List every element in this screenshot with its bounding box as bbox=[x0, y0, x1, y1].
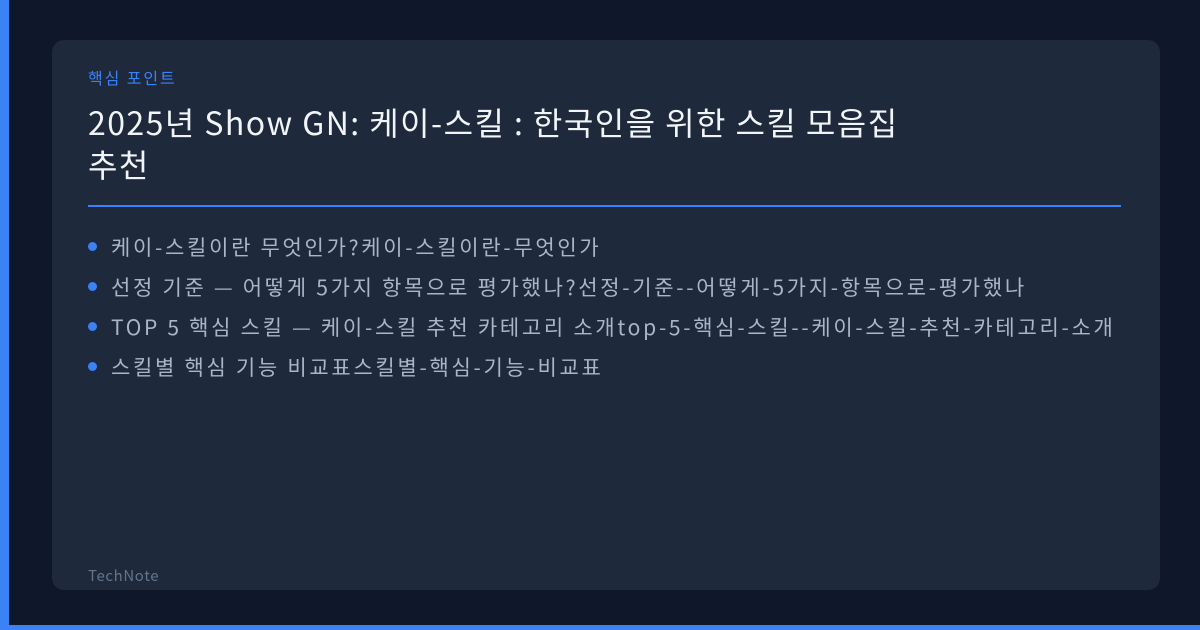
bullet 4: 스킬별 핵심 기능 비교표스킬별-핵심-기능-비교표 bbox=[111, 352, 604, 382]
label: key points: 핵심 포인트 bbox=[88, 65, 177, 89]
bullet 3: TOP 5 핵심 스킬 — 케이-스킬 추천 카테고리 소개top-5-핵심-스킬--케이-스킬-추천-카테고리-소개 bbox=[111, 312, 1116, 342]
title: 추천 bbox=[88, 141, 150, 187]
title: 2025년 Show GN: 케이-스킬 : 한국인을 위한 스킬 모음집 bbox=[88, 99, 899, 145]
bullet 2: 선정 기준 — 어떻게 5가지 항목으로 평가했나?선정-기준--어떻게-5가지-항목으로-평가했나 bbox=[111, 272, 1027, 302]
title bbox=[88, 99, 899, 187]
bullet list bbox=[88, 232, 1116, 382]
bullet 1: 케이-스킬이란 무엇인가?케이-스킬이란-무엇인가 bbox=[111, 232, 601, 262]
footer: brand: TechNote bbox=[88, 565, 159, 586]
